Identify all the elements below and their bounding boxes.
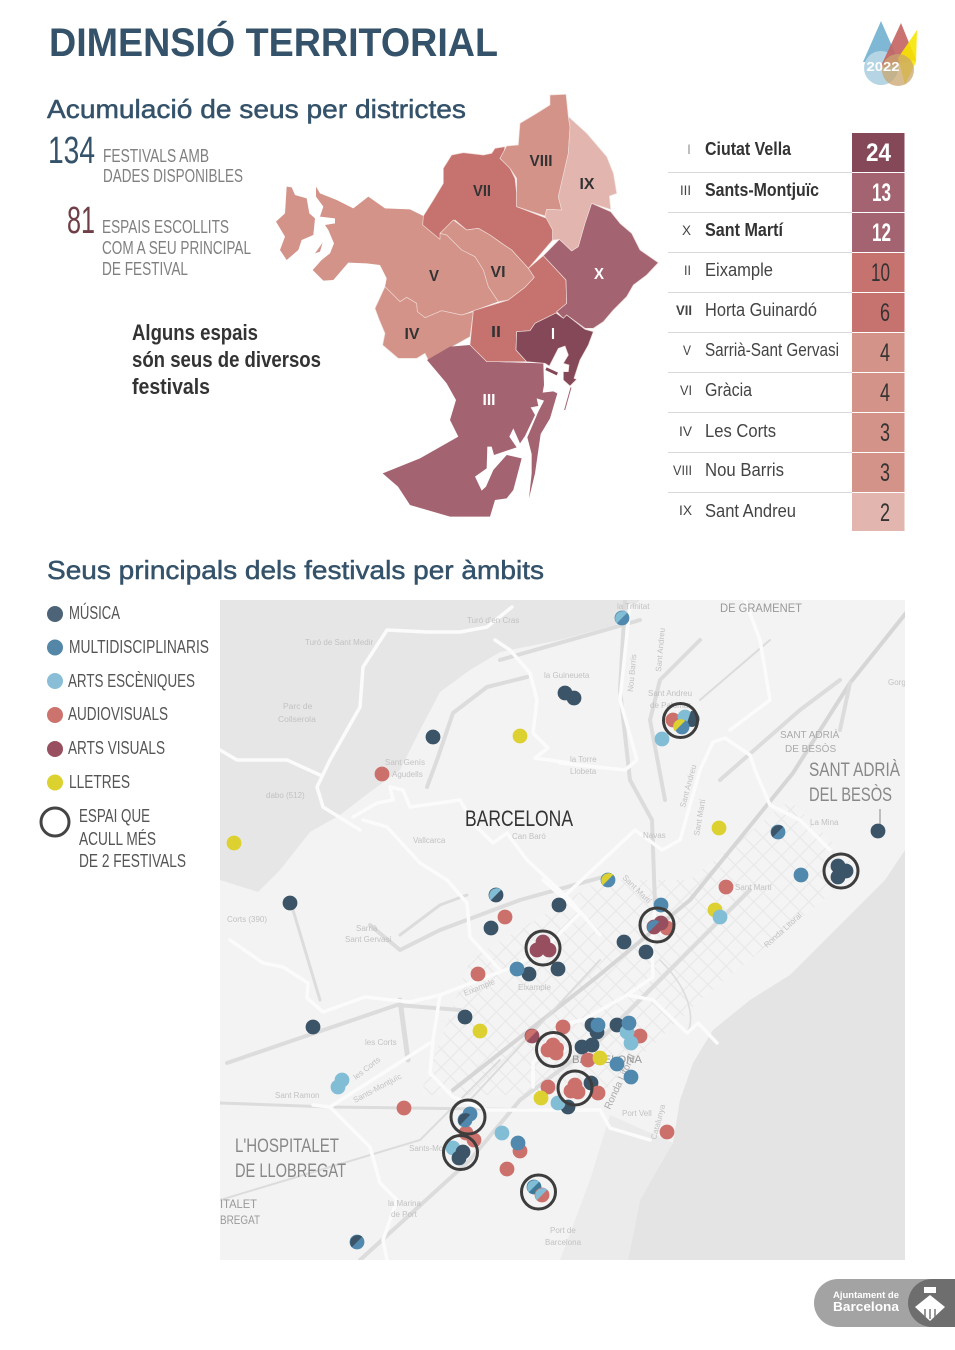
title: DIMENSIÓ TERRITORIAL [49,19,498,65]
map labels: Turó de Sant Medir [305,638,374,647]
map labels: Catalunya [649,1103,667,1141]
map labels: Sant Martí [621,873,654,906]
stat: 81 espais: 81 [67,200,95,242]
map labels: Parc de [283,701,313,711]
map base: Collserola hills [220,600,640,892]
district names: Nou Barris [705,460,784,480]
district labels: X [594,266,604,283]
district III Sants-Montjuïc [383,345,557,517]
roman numerals [673,141,693,518]
ring cluster: Gràcia [526,931,560,965]
map labels: Ronda Litoral [603,1053,638,1111]
choropleth map: districts [276,94,658,517]
heading: venues map: Seus principals dels festivals per àmbits [47,555,544,585]
map labels: Collserola [278,714,316,724]
district VII Horta Guinardó [423,147,553,268]
roman numerals: X [682,222,692,238]
stat: 134 festivals [48,130,243,186]
map labels: de Port [391,1210,418,1219]
table: districts ranking [668,133,904,531]
map labels: Port de [550,1226,576,1235]
map labels: Llobeta [570,767,597,776]
map labels: Sant Genís [385,758,425,767]
legend item: multidisciplinaris [47,637,209,657]
map labels: Sarrià [356,924,378,933]
stat: 81 espais: COM A SEU PRINCIPAL [102,238,251,258]
legend item: lletres [47,772,130,792]
map base: grey roads [220,600,906,1260]
map labels: Eixample [518,983,551,992]
música venues [283,686,885,1114]
note: shared venues: festivals [132,374,210,399]
roman numerals: VII [676,302,692,318]
district names: Les Corts [705,421,776,441]
logo: Ajuntament de Barcelona: Barcelona [833,1299,900,1314]
ring cluster: Montjuïc [522,1175,556,1209]
values: 6 [880,299,890,327]
map labels: la Guineueta [544,671,590,680]
legend item: shared venue ring: ESPAI QUE [79,806,150,826]
city label: Barcelona: BARCELONA [465,806,573,831]
map labels: Ronda Litoral [762,911,804,949]
map labels: Sant Andreu [648,689,692,698]
legend item: música [47,602,120,623]
roman numerals: IX [679,502,693,518]
legend item: audiovisuals: AUDIOVISUALS [68,704,168,724]
map labels: Eixample [462,977,497,998]
legend item: multidisciplinaris: MULTIDISCIPLINARIS [69,637,209,657]
map labels: Sant Andreu [654,628,667,672]
map labels: Sant Martí [692,798,708,836]
district IV Les Corts [375,287,473,360]
multidisciplinary venues on top [511,1016,636,1150]
legend item: arts escèniques: ARTS ESCÈNIQUES [68,671,195,691]
venue dots [227,611,885,1249]
values [866,139,891,527]
map labels: les Corts [352,1055,382,1082]
stat: 81 espais [67,200,251,279]
city label: L'Hospitalet de Llobregat: L'HOSPITALET [235,1136,339,1157]
stat: 81 espais: ESPAIS ESCOLLITS [102,217,229,237]
note: shared venues: Alguns espais [132,320,258,345]
city label: L'Hospitalet de Llobregat: DE LLOBREGAT [235,1161,346,1182]
audiovisual venues [375,767,733,1176]
district names: Sants-Montjuïc [705,180,819,200]
district labels: IX [580,176,595,193]
legend item: audiovisuals [47,704,168,724]
ring cluster: Sants south [444,1136,478,1170]
district names: Sarrià-Sant Gervasi [705,340,839,360]
district VI Gràcia [440,220,534,302]
map labels: Nou Barris [626,654,638,692]
heading: districts: Acumulació de seus per districtes [47,94,466,124]
roman numerals: VIII [673,462,692,478]
map labels: Barcelona [545,1238,582,1247]
district names: Horta Guinardó [705,300,817,320]
logo: Ajuntament de Barcelona [814,1279,955,1327]
values: 3 [880,419,890,447]
note: shared venues: són seus de diversos [132,347,321,372]
map: venues [220,600,906,1260]
district labels: VI [490,264,506,281]
district IX Sant Andreu [545,117,617,251]
map labels: Sant Andreu [678,764,698,809]
map labels: DE GRAMENET [720,603,802,615]
map labels: Turó d'en Cras [467,616,519,625]
ring cluster: Raval south [558,1071,592,1105]
district labels: V [429,268,439,285]
map base: sea [628,850,905,1260]
city label: L'Hospitalet de Llobregat [236,1138,346,1177]
roman numerals: IV [679,423,693,439]
city label: Sant Adrià del Besòs [809,760,900,826]
map labels: Sants-Montjuïc [352,1072,403,1105]
ring cluster: Raval north [536,1032,570,1066]
map labels: dabo (512) [266,791,305,800]
map labels: Port Vell [622,1109,652,1118]
district II Eixample [470,256,567,362]
literature venues [227,729,726,1105]
stat: 81 espais: DE FESTIVAL [102,259,188,279]
roman numerals: V [683,342,692,358]
map labels: Sant Martí [735,883,773,892]
legend item: lletres: LLETRES [69,772,130,792]
map labels: les Corts [365,1038,397,1047]
map labels: DE BESÒS [785,742,836,755]
map labels: la Torre [570,755,597,764]
map labels: BARCELONA [572,1054,643,1066]
map labels [220,602,906,1247]
legend item: arts escèniques [47,671,195,691]
icon: festival 2022 logo: 2022 [866,59,900,74]
district names: Sant Andreu [705,501,796,521]
city label: Sant Adrià del Besòs: SANT ADRIÀ [809,760,900,781]
legend item: arts visuals [47,738,165,758]
shared-category venues [350,611,785,1249]
district labels: III [482,392,496,409]
roman numerals: II [684,262,691,278]
ring cluster: Fòrum [824,854,858,888]
values: 4 [880,379,890,407]
values: 4 [880,339,890,367]
values: 2 [880,499,890,527]
district V Sarrià-Sant Gervasi [276,187,498,318]
map base: port [560,1115,673,1260]
ring cluster: Sant Andreu [664,704,700,738]
district names: Gràcia [705,380,753,400]
map labels: Vallcarca [413,836,446,845]
map labels: Sant Gervasi [345,935,391,944]
ring cluster: Glòries [640,908,674,942]
district labels: VII [473,183,491,200]
map labels: Gorg [888,678,906,687]
map base: street grid [420,800,860,1095]
district labels: VIII [530,153,552,170]
map labels: Can Baró [512,832,546,841]
performing arts venues [331,732,727,1140]
map labels: Navas [643,831,666,840]
values: 3 [880,459,890,487]
district I Ciutat Vella [516,313,593,410]
district VIII Nou Barris [500,94,570,216]
values: 13 [872,179,891,207]
district labels: I [551,326,555,343]
map labels: de Palomar [650,701,691,710]
district labels [404,153,604,409]
map base: district borders [220,600,830,1260]
map labels: SANT ADRIÀ [780,728,840,741]
legend item: shared venue ring: ACULL MÉS [79,829,156,849]
logo: Ajuntament de Barcelona: Ajuntament de [833,1290,899,1301]
values: 12 [872,219,891,247]
map labels: Sants-Montjuïc [409,1144,462,1153]
values: 24 [866,139,891,167]
roman numerals: VI [680,382,692,398]
multidisciplinary venues [510,868,808,1084]
city label: Sant Adrià del Besòs: DEL BESÒS [809,784,892,806]
district labels: II [491,324,501,341]
district labels: IV [404,326,420,343]
map labels: la Trinitat [617,602,650,611]
district names: Sant Martí [705,220,784,240]
stat: 134 festivals: 134 [48,130,95,172]
district X Sant Martí [543,203,658,328]
legend item: arts visuals: ARTS VISUALS [68,738,165,758]
map labels: ITALET [220,1197,258,1211]
map labels: Corts (390) [227,915,267,924]
district names: Eixample [705,260,773,280]
stat: 134 festivals: FESTIVALS AMB [103,146,209,166]
legend item: música: MÚSICA [69,602,120,623]
district names [705,139,839,521]
map labels: BREGAT [220,1213,261,1227]
map labels: Sant Ramon [275,1091,319,1100]
value cells [852,133,904,531]
legend item: shared venue ring [41,806,186,871]
note: shared venues [132,320,321,399]
map labels: La Mina [810,818,839,827]
roman numerals: I [688,141,690,157]
legend item: shared venue ring: DE 2 FESTIVALS [79,851,186,871]
stat: 134 festivals: DADES DISPONIBLES [103,166,243,186]
ring cluster: Sants north [451,1100,485,1134]
values: 10 [871,259,890,287]
legend [41,602,209,871]
icon: festival 2022 logo [863,21,917,86]
roman numerals: III [680,182,691,198]
map labels: la Marina [388,1199,421,1208]
district names: Ciutat Vella [705,139,792,159]
map labels: Agudells [392,770,423,779]
